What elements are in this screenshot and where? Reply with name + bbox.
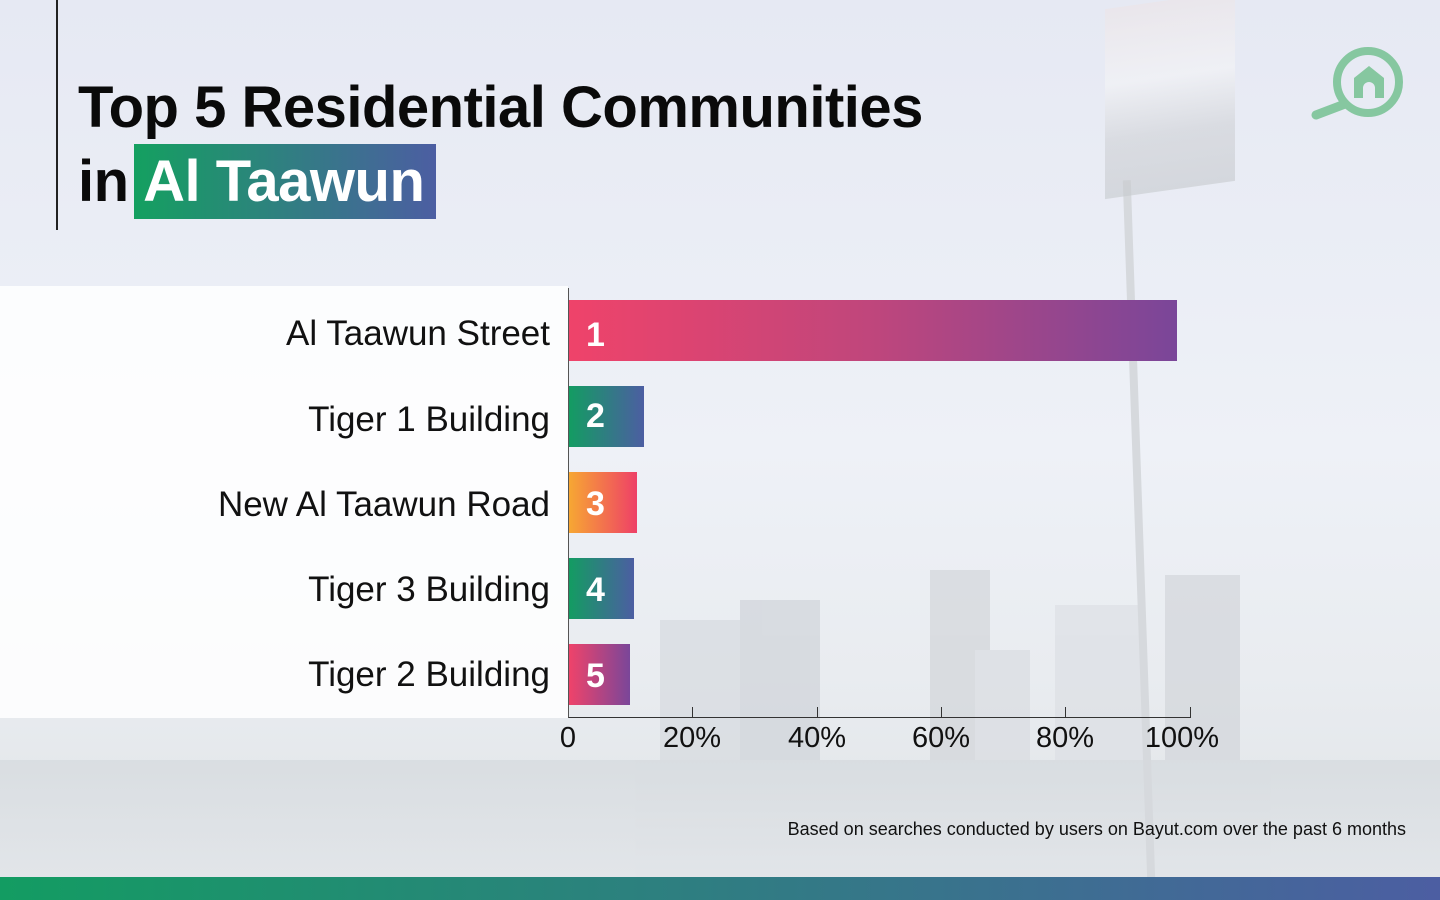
text: 20% bbox=[663, 722, 721, 754]
text: Tiger 1 Building bbox=[308, 400, 550, 439]
text: Tiger 2 Building bbox=[308, 655, 550, 694]
text: 40% bbox=[788, 722, 846, 754]
title: Al Taawun bbox=[143, 149, 424, 214]
text: 80% bbox=[1036, 722, 1094, 754]
title: Top 5 Residential Communities bbox=[78, 75, 923, 140]
labels: Al Taawun Street bbox=[286, 314, 550, 353]
bar 5: 5 bbox=[586, 657, 605, 695]
bar 3 bbox=[569, 472, 637, 533]
text: New Al Taawun Road bbox=[218, 485, 550, 524]
left accent line bbox=[56, 0, 58, 230]
bar chart axes bbox=[568, 288, 1191, 718]
bar 2 bbox=[569, 386, 644, 447]
axis tick labels: 0 bbox=[560, 722, 576, 754]
bar 4: 4 bbox=[586, 571, 605, 609]
text: 100% bbox=[1145, 722, 1219, 754]
bar 1 bbox=[569, 300, 1177, 361]
label panel bbox=[0, 286, 568, 718]
background skyline bbox=[0, 570, 1440, 796]
bar 4 bbox=[569, 558, 634, 619]
bottom gradient bar bbox=[0, 877, 1440, 900]
bar 1: 1 bbox=[586, 316, 605, 354]
title bbox=[78, 75, 923, 219]
bar 3: 3 bbox=[586, 485, 605, 523]
logo: magnifier house bbox=[1312, 47, 1403, 120]
bar 2: 2 bbox=[586, 397, 605, 435]
background flag pole bbox=[1123, 180, 1155, 880]
text: Tiger 3 Building bbox=[308, 570, 550, 609]
title: in bbox=[78, 149, 129, 214]
background flag bbox=[1105, 0, 1235, 199]
bar 5 bbox=[569, 644, 630, 705]
footnote: Based on searches conducted by users on Bayut.com over the past 6 months bbox=[788, 819, 1406, 839]
text: 60% bbox=[912, 722, 970, 754]
